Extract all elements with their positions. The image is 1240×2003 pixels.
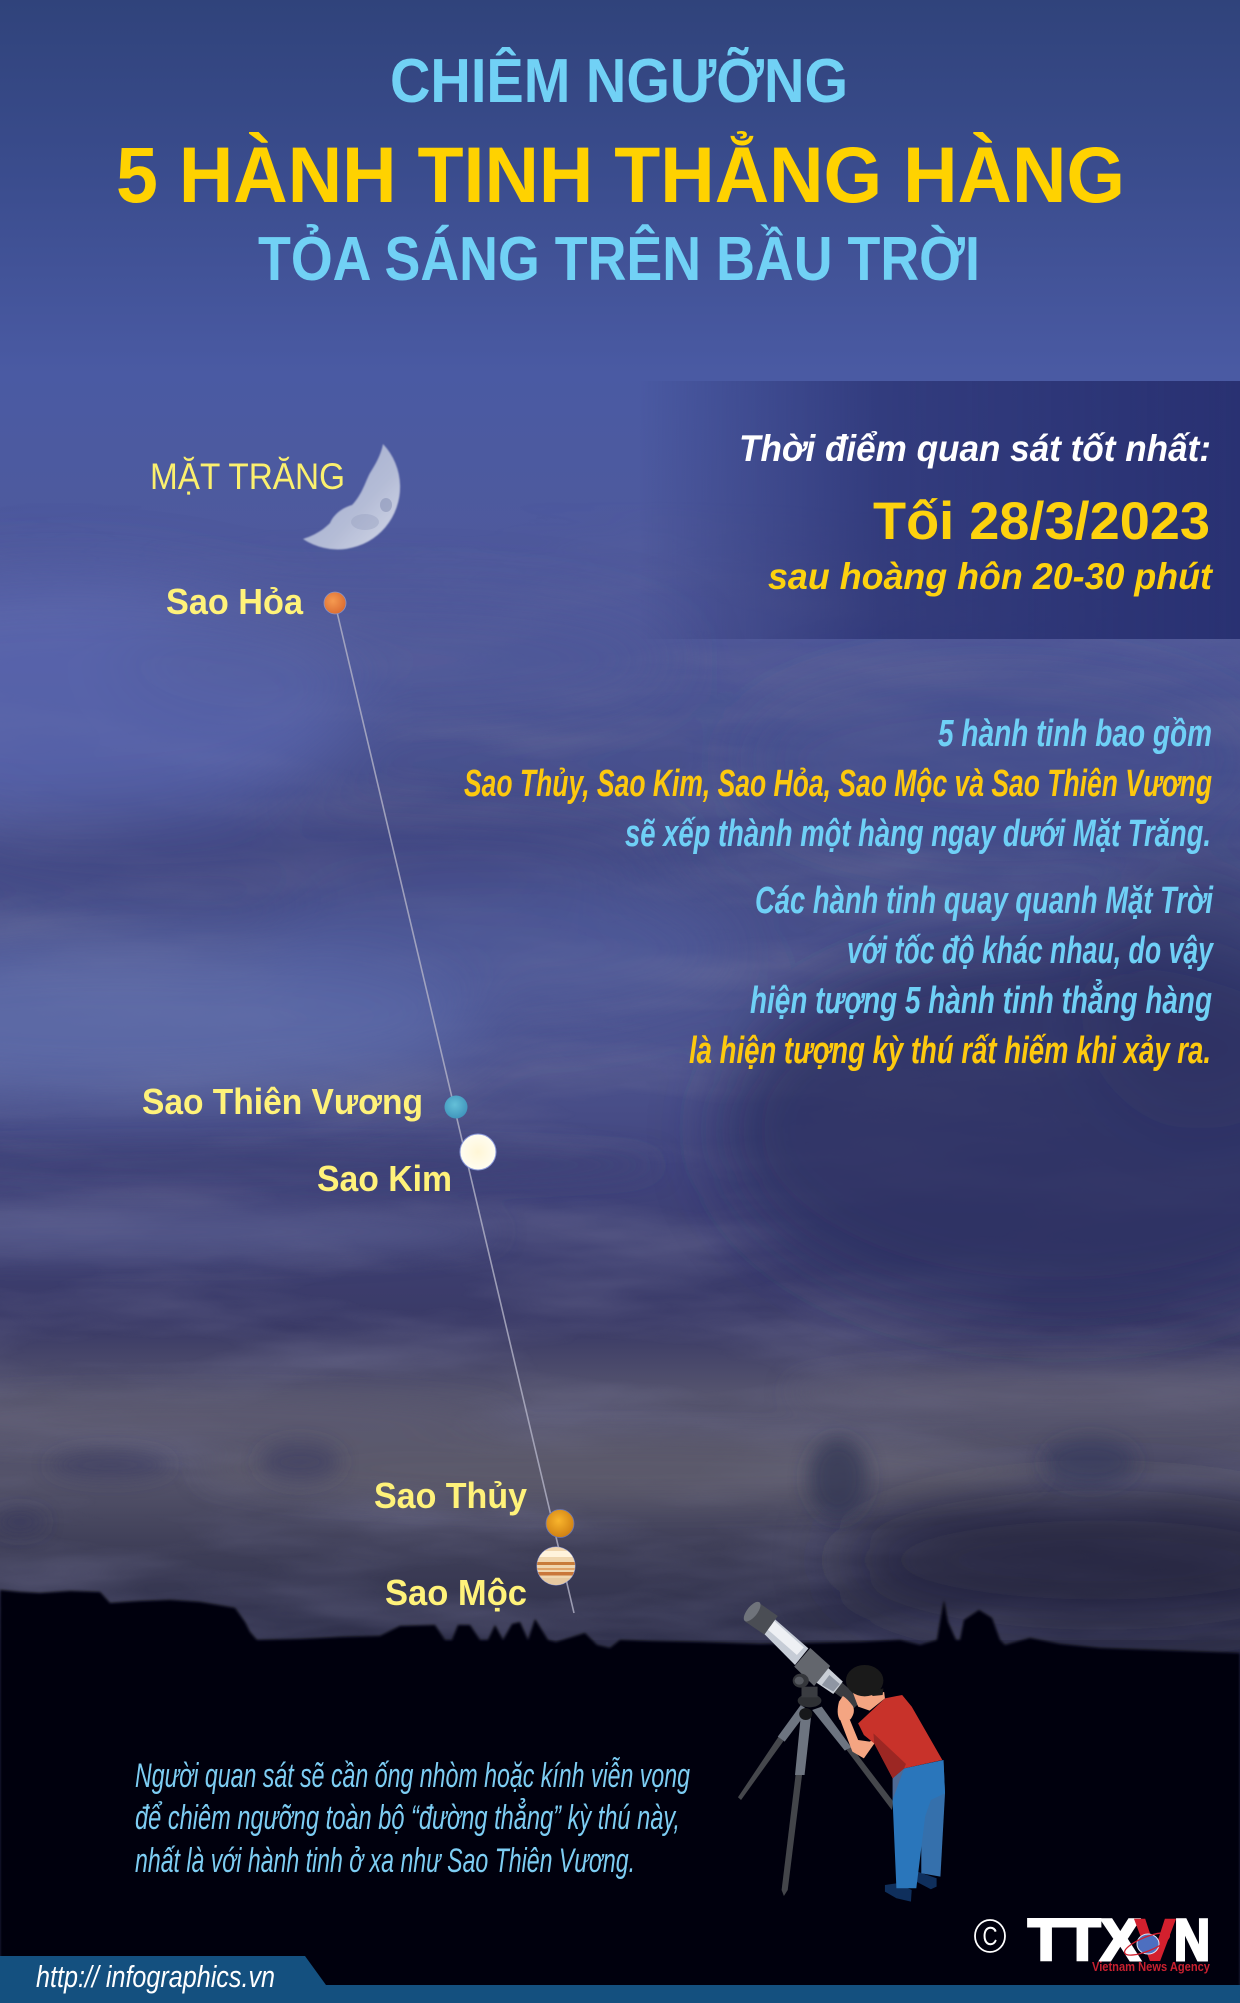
observer — [838, 1665, 945, 1902]
text block: planets description — [464, 713, 1212, 855]
icon: Venus — [460, 1134, 496, 1170]
title line 2: 5 HÀNH TINH THẲNG HÀNG — [116, 130, 1125, 219]
text block: observer note — [135, 1757, 690, 1880]
label: Mercury: Sao Thủy — [374, 1475, 527, 1516]
icon: Uranus — [444, 1096, 468, 1118]
logo: TTXVN: V — [1135, 1908, 1175, 1973]
label: Mars: Sao Hỏa — [166, 581, 304, 622]
logo: copyright mark: C — [982, 1921, 998, 1951]
label: Jupiter: Sao Mộc — [385, 1572, 527, 1613]
text block: rarity explanation — [689, 880, 1214, 1072]
telescope tube — [741, 1600, 859, 1711]
title — [116, 47, 1125, 294]
text block: observer note: để chiêm ngưỡng toàn bộ “đường thẳng” kỳ thú này, — [135, 1799, 680, 1837]
icon: Jupiter — [536, 1546, 576, 1586]
label: moon: MẶT TRĂNG — [150, 456, 345, 497]
icon: Mercury — [546, 1510, 574, 1538]
logo: TTXVN: TTX — [1028, 1908, 1140, 1973]
icon: person with telescope — [738, 1600, 945, 1902]
time note: sau hoàng hôn 20-30 phút — [768, 556, 1214, 597]
label: Uranus: Sao Thiên Vương — [142, 1081, 423, 1122]
alignment line — [337, 612, 574, 1613]
icon: moon — [303, 444, 400, 549]
panel: black ground with horizon silhouette — [0, 1590, 1240, 2003]
panel: best viewing time — [640, 381, 1240, 639]
footer bar — [0, 1956, 1240, 2003]
text block: observer note: nhất là với hành tinh ở xa như Sao Thiên Vương. — [135, 1842, 635, 1880]
text block: observer note: Người quan sát sẽ cần ống nhòm hoặc kính viễn vọng — [135, 1757, 690, 1795]
logo: TTXVN: N — [1174, 1908, 1210, 1973]
label: Venus: Sao Kim — [317, 1158, 452, 1199]
title line 3: TỎA SÁNG TRÊN BẦU TRỜI — [258, 225, 980, 294]
telescope tripod — [738, 1687, 893, 1896]
date: Tối 28/3/2023 — [873, 492, 1210, 551]
heading: best viewing time: Thời điểm quan sát tốt nhất: — [739, 428, 1211, 469]
logo: copyright mark — [975, 1920, 1005, 1952]
website address: http:// infographics.vn — [36, 1959, 275, 1994]
title line 1: CHIÊM NGƯỠNG — [390, 47, 848, 116]
logo subtitle: Vietnam News Agency — [1092, 1960, 1210, 1974]
logo: TTXVN — [1028, 1908, 1210, 1974]
icon: Mars — [324, 592, 346, 614]
